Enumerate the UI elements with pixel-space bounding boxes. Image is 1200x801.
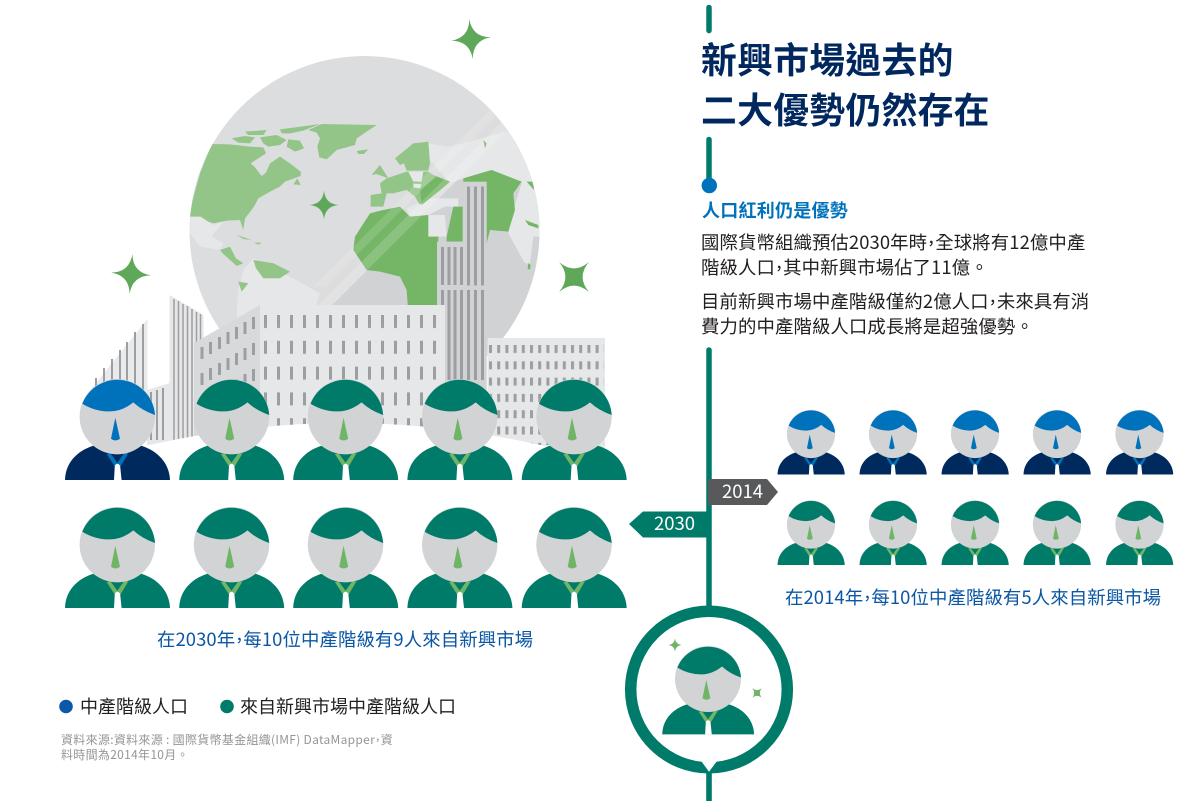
paragraph 2 — [701, 282, 1089, 338]
sheen bands — [353, 172, 436, 255]
dark green countries — [353, 140, 538, 313]
timeline: main segment — [706, 350, 712, 612]
legend: emerging markets: 來自新興市場中產階級人口 — [240, 693, 456, 719]
paragraph 1: 階級人口,其中新興市場佔了11億。 — [701, 248, 989, 280]
tag label 2014: 2014 — [722, 478, 763, 504]
tag label 2030: 2030 — [654, 510, 695, 536]
source note: 料時間為2014年10月。 — [61, 746, 189, 763]
main building front — [260, 305, 445, 440]
source note: 資料來源:資料來源 : 國際貨幣基金組織(IMF) DataMapper,資 — [61, 727, 393, 748]
people 2030: row 2 — [65, 507, 627, 608]
legend: middle class: 中產階級人口 — [80, 693, 188, 719]
timeline: bottom segment — [706, 768, 712, 801]
title — [701, 32, 990, 134]
legend dot: middle class — [59, 700, 73, 713]
legend dot: emerging markets — [220, 700, 234, 713]
paragraph 1: 國際貨幣組織預估2030年時,全球將有12億中產 — [701, 223, 1085, 255]
darker hemisphere — [332, 130, 540, 350]
title: 二大優勢仍然存在 — [701, 82, 990, 134]
globe with world map — [190, 56, 540, 356]
right building — [488, 338, 605, 448]
city buildings — [60, 182, 630, 620]
people 2014: row 1 — [778, 410, 1173, 475]
tag: 2014 — [708, 479, 778, 505]
ring with person — [631, 611, 787, 772]
section heading: 人口紅利仍是優勢 — [702, 197, 848, 223]
timeline: blue node — [702, 178, 717, 193]
main building side — [194, 305, 260, 440]
sparkle: right — [544, 247, 604, 307]
paragraph 1 — [701, 223, 1085, 280]
low building — [147, 383, 170, 445]
sparkle: on globe — [310, 190, 338, 220]
source note — [61, 727, 393, 763]
paragraph 2: 費力的中產階級人口成長將是超強優勢。 — [701, 312, 1034, 338]
sparkle: top — [449, 17, 493, 61]
paragraph 2: 目前新興市場中產階級僅約2億人口,未來具有消 — [701, 282, 1089, 314]
other land — [190, 131, 540, 318]
tower — [437, 182, 487, 442]
tag: 2030 — [629, 512, 709, 538]
people 2030: row 1 — [65, 379, 627, 480]
timeline: middle segment — [706, 140, 712, 180]
timeline: top segment — [706, 8, 712, 30]
slim building — [170, 295, 204, 445]
caption 2014: 在2014年,每10位中產階級有5人來自新興市場 — [785, 578, 1161, 610]
left building stripes — [92, 319, 148, 400]
title: 新興市場過去的 — [701, 32, 954, 84]
ground — [60, 423, 630, 620]
caption 2030: 在2030年,每10位中產階級有9人來自新興市場 — [157, 620, 533, 652]
light green countries — [180, 124, 450, 292]
sparkle: left — [110, 253, 152, 295]
people 2014: row 2 — [778, 500, 1173, 565]
